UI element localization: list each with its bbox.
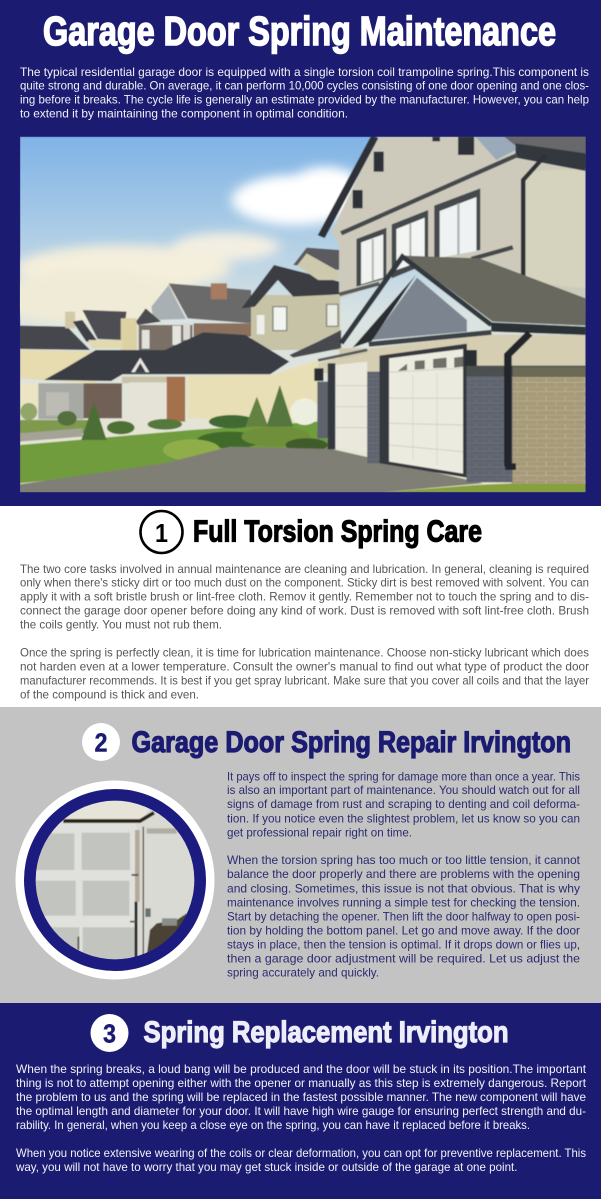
intro text block: to extend it by maintaining the component in optimal condition. <box>20 108 348 120</box>
text block: section 2: spring accurately and quickly. <box>227 966 379 980</box>
upstairs windows <box>356 228 386 287</box>
text block: section 1: The two core tasks involved in annual maintenance are cleaning and lubrication. In general, cleaning is required <box>20 563 589 576</box>
text block: section 1: not harden even at a lower temperature. Consult the owner's manual to find out what type of product the door <box>20 660 589 674</box>
text block: section 2: balance the door properly and there are problems with the opening <box>227 868 580 881</box>
text block: section 3: thing is not to attempt opening either with the opener or manually as this step is extremely dangerous. Report <box>16 1077 587 1090</box>
lamps <box>465 350 477 366</box>
icon: number 2 <box>82 723 120 761</box>
icon: number 1: 1 <box>155 518 168 548</box>
heading: section 3: Spring Replacement Irvington <box>144 1016 508 1049</box>
text block: section 2: tion. If you notice even the slightest problem, let us know so you can <box>227 812 580 826</box>
text block: section 2: and closing. Sometimes, this issue is not that obvious. That is why <box>227 882 580 896</box>
lower wall <box>318 334 586 373</box>
driveway <box>20 447 483 492</box>
intro text block: The typical residential garage door is equipped with a single torsion coil trampoline spring.This component is <box>20 66 589 79</box>
text block: section 1: Once the spring is perfectly clean, it is time for lubrication maintenance. Choose non-sticky lubricant which does <box>20 646 589 660</box>
text block: section 2: is also an important part of maintenance. You should watch out for all <box>227 784 580 797</box>
text block: section 3: When the spring breaks, a loud bang will be produced and the door will be stuck in its position.The important <box>16 1063 587 1076</box>
text block: section 2: stays in place, then the tension is optimal. If it drops down or flies up, <box>227 938 580 952</box>
left wall pillar <box>317 382 328 438</box>
icon: number 1 <box>140 511 182 553</box>
panel: section 3 background <box>0 1003 601 1199</box>
eaves and trim <box>321 137 375 237</box>
slate pillar <box>367 372 380 463</box>
text block: section 2: signs of damage from rust and scraping to denting and coil deforma- <box>227 798 580 811</box>
panel: section 2 background <box>0 707 601 1003</box>
text block: section 3 <box>15 1063 587 1174</box>
intro text block <box>20 66 589 120</box>
text block: section 3: way, you will not have to worry that you may get stuck inside or outside of the garage at one point. <box>15 1161 518 1174</box>
text block: section 1: only when there's sticky dirt or too much dust on the component. Sticky dirt is best removed with solvent. You can <box>20 576 589 590</box>
far left house <box>20 326 90 350</box>
garage roof and gable <box>404 256 586 326</box>
left garage door <box>335 362 367 452</box>
text block: section 3: the optimal length and diameter for your door. It will have high wire gauge for ensuring perfect strength and du- <box>16 1105 586 1118</box>
text block: section 2: Start by detaching the opener. Then lift the door halfway to open posi- <box>227 910 580 924</box>
text block: section 2: then a garage door adjustment will be required. Let us adjust the <box>227 952 580 966</box>
downspout <box>523 156 545 287</box>
text block: section 2: When the torsion spring has too much or too little tension, it cannot <box>227 854 581 867</box>
main garage door <box>379 344 467 478</box>
right brick base <box>512 377 586 484</box>
photo: suburban houses with garage doors <box>0 135 590 492</box>
text block: section 2: It pays off to inspect the spring for damage more than once a year. This <box>227 770 580 784</box>
text block: section 1: of the compound is thick and even. <box>20 688 199 702</box>
text block: section 1 <box>20 563 589 702</box>
text block: section 1: manufacturer recommends. It is best if you get spray lubricant. Make sure that you cover all coils and that the layer <box>20 674 589 688</box>
intro text block: ing before it breaks. The cycle life is generally an estimate provided by the manufacturer. However, you can help <box>20 94 589 106</box>
photo: damaged garage door in circle <box>16 780 214 980</box>
icon: number 2: 2 <box>94 728 108 758</box>
intro text block: quite strong and durable. On average, it can perform 10,000 cycles consisting of one door opening and one clos- <box>20 80 589 92</box>
heading: section 1: Full Torsion Spring Care <box>193 514 482 548</box>
low foreground roof <box>44 332 289 381</box>
text block: section 1: connect the garage door opener before doing any kind of work. Dust is removed with soft lint-free cloth. Brush <box>20 604 589 618</box>
text block: section 3: When you notice extensive wearing of the coils or clear deformation, you can opt for preventive replacement. This <box>16 1147 586 1160</box>
panel: section 1 background <box>0 506 601 707</box>
panel: header background <box>0 0 601 506</box>
text block: section 2 <box>227 770 581 980</box>
middle house <box>251 295 340 350</box>
lawn <box>20 420 97 433</box>
text block: section 3: the problem to us and the spring will be replaced in the fastest possible manner. The new component will have <box>16 1091 586 1104</box>
icon: number 3: 3 <box>103 1018 116 1048</box>
brown house <box>169 283 251 323</box>
text block: section 2: tion by holding the bottom panel. Let go and move away. If the door <box>227 924 580 938</box>
text block: section 2: get professional repair right on time. <box>227 826 412 840</box>
text block: section 1: apply it with a soft bristle brush or lint-free cloth. Remov it gently. Remember not to touch the spring and to dis- <box>20 590 589 604</box>
icon: number 3 <box>90 1014 128 1052</box>
text block: section 1: the coils gently. You must not rub them. <box>20 618 222 632</box>
text block: section 3: rability. In general, when you keep a close eye on the spring, you can have it replaced before it breaks. <box>16 1119 530 1132</box>
main house upper wall <box>332 137 586 312</box>
text block: section 2: maintenance involves running a simple test for checking the tension. <box>227 896 580 910</box>
